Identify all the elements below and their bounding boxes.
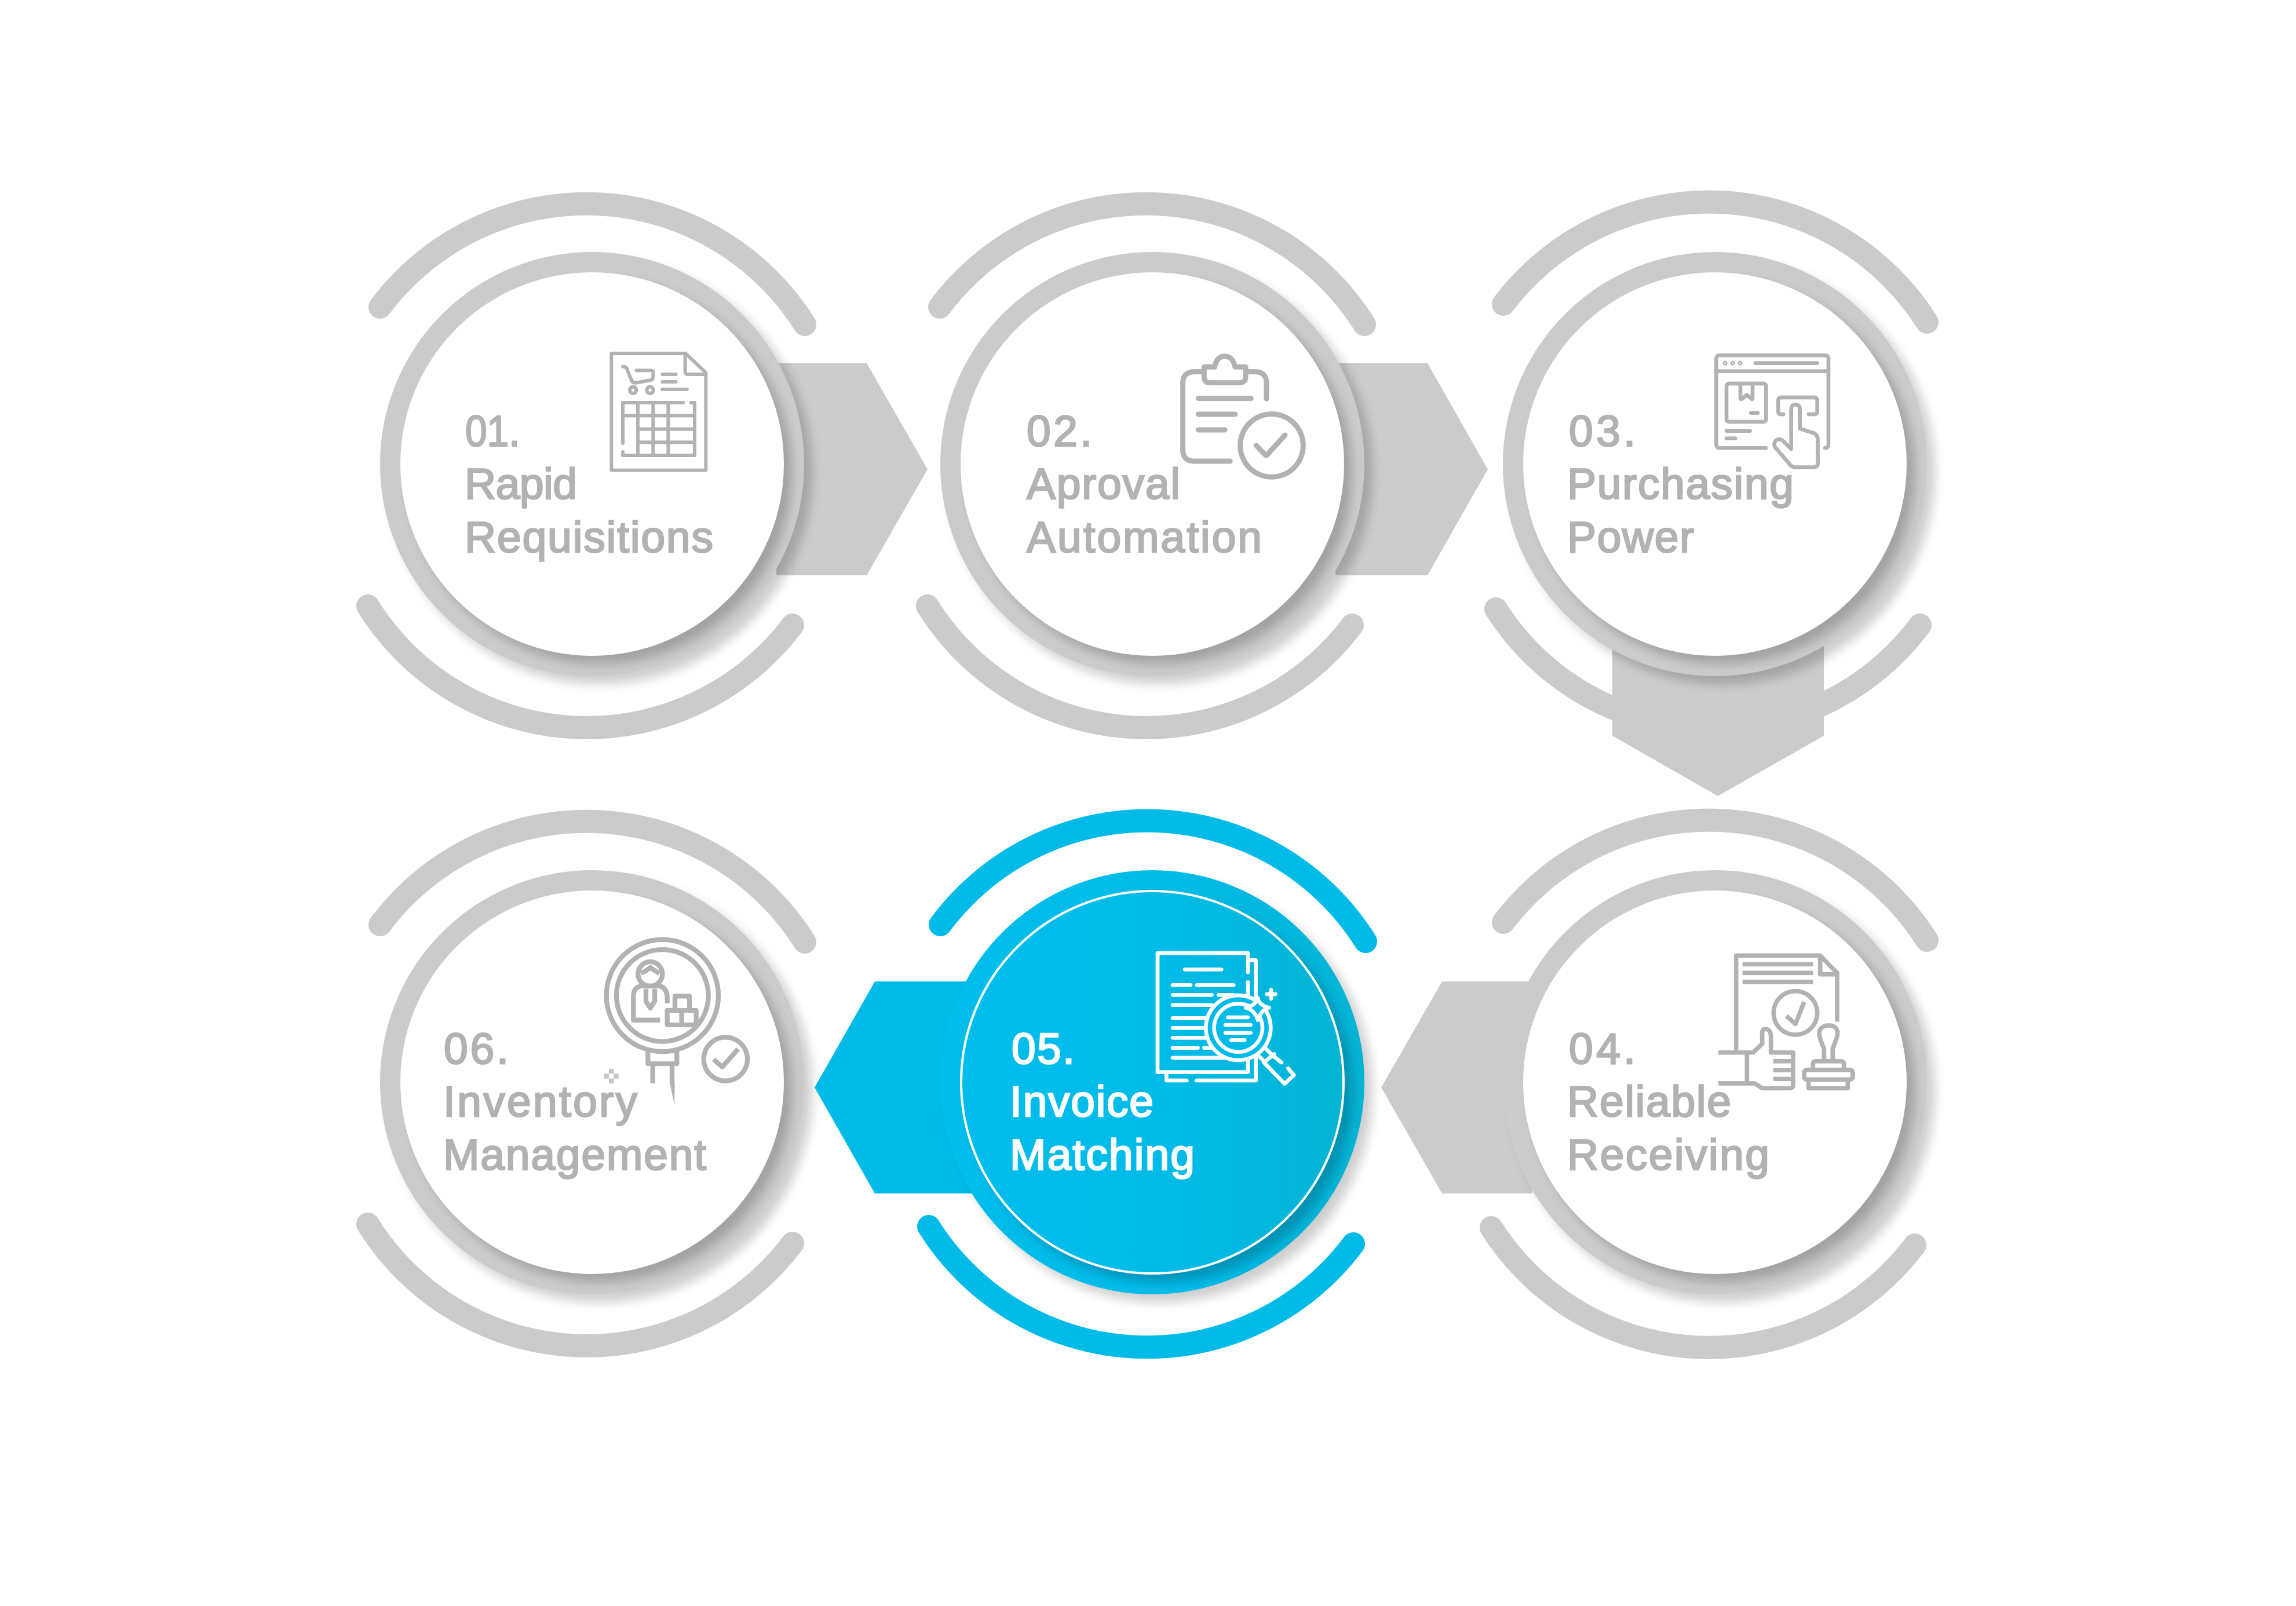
icon: spreadsheet with cart bbox=[611, 353, 706, 470]
icon: document with thumb and stamp bbox=[1718, 955, 1853, 1088]
ring: step 2 bbox=[940, 252, 1373, 684]
text: step 1 label: Rapid bbox=[465, 459, 577, 508]
text: step 4 label: Reliable bbox=[1567, 1077, 1731, 1126]
panel: step 5 Invoice Matching (highlighted) bbox=[929, 821, 1373, 1347]
text: step 6 label: 06. bbox=[444, 1024, 509, 1073]
arrow: step 4 to step 5 bbox=[1381, 981, 1532, 1193]
arrow: step 1 to step 2 bbox=[776, 363, 928, 575]
text: step 5 label: Matching bbox=[1010, 1130, 1195, 1179]
arcs: step 1 bbox=[368, 204, 805, 728]
icon: magnifier with person and boxes bbox=[604, 940, 747, 1105]
ring: step 6 bbox=[380, 870, 812, 1302]
ring: step 3 bbox=[1503, 252, 1935, 684]
text: step 3 label: Purchasing bbox=[1567, 459, 1794, 508]
text: step 3 label: 03. bbox=[1569, 407, 1636, 455]
text: step 2 label: Automation bbox=[1027, 513, 1262, 561]
text: step 5 label: 05. bbox=[1012, 1024, 1075, 1073]
panel: step 6 Inventory Management bbox=[368, 822, 812, 1346]
icon: browser with box and hand bbox=[1716, 355, 1828, 468]
panel: step 3 Purchasing Power bbox=[1496, 202, 1935, 796]
text: step 2 label: 02. bbox=[1027, 407, 1092, 455]
arrow: step 5 to step 6 bbox=[815, 981, 973, 1193]
text: step 6 label: Management bbox=[443, 1130, 706, 1179]
text: step 4 label: 04. bbox=[1569, 1024, 1636, 1073]
text: step 3 label bbox=[1567, 407, 1794, 561]
ring: step 1 bbox=[380, 252, 812, 684]
text: step 2 label bbox=[1027, 407, 1262, 561]
icon: invoice with magnifier bbox=[1158, 953, 1294, 1084]
arcs: step 4 bbox=[1491, 820, 1927, 1348]
text: step 4 label: Receiving bbox=[1567, 1130, 1769, 1179]
panel: step 4 Reliable Receiving bbox=[1491, 820, 1935, 1348]
panel: step 1 Rapid Requisitions bbox=[368, 204, 812, 728]
ring: step 4 bbox=[1503, 870, 1935, 1302]
arrow: step 3 to step 4 bbox=[1612, 637, 1824, 796]
arcs: step 5 bbox=[929, 821, 1366, 1347]
text: step 1 label bbox=[465, 407, 713, 561]
icon: clipboard with check bbox=[1183, 356, 1303, 477]
text: step 2 label: Aproval bbox=[1027, 459, 1180, 508]
text: step 1 label: 01. bbox=[465, 407, 520, 455]
text: step 1 label: Requisitions bbox=[465, 513, 713, 561]
text: step 6 label bbox=[443, 1024, 706, 1179]
text: step 5 label bbox=[1010, 1024, 1195, 1179]
arcs: step 6 bbox=[368, 822, 805, 1346]
arcs: step 3 bbox=[1496, 202, 1927, 728]
ring: step 5 bbox=[940, 870, 1373, 1302]
arcs: step 2 bbox=[928, 204, 1364, 728]
text: step 5 label: Invoice bbox=[1010, 1077, 1154, 1126]
text: step 6 label: Inventory bbox=[443, 1077, 637, 1126]
panel: step 2 Aproval Automation bbox=[928, 204, 1373, 728]
arrow: step 2 to step 3 bbox=[1335, 363, 1488, 575]
text: step 3 label: Power bbox=[1567, 513, 1694, 561]
text: step 4 label bbox=[1567, 1024, 1769, 1179]
